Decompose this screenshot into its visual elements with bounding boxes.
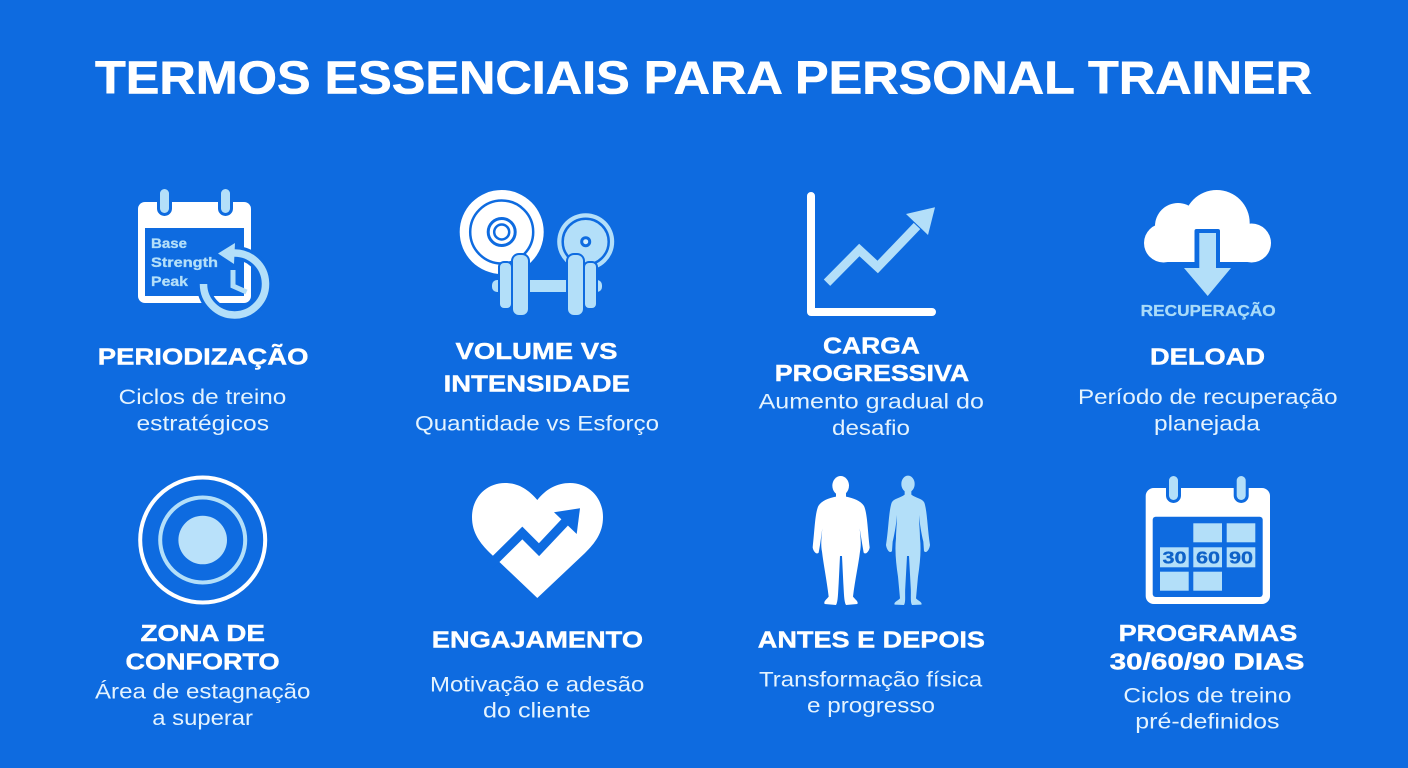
icon: rising line chart — [811, 196, 935, 312]
panel: engajamento — [430, 483, 644, 723]
heading: volume vs intensidade: INTENSIDADE — [444, 371, 630, 397]
icon: calendar with 30 60 90: 90 — [1229, 548, 1253, 568]
icon: concentric target — [140, 478, 265, 602]
icon: calendar with 30 60 90 — [1146, 476, 1270, 604]
icon: cloud with down arrow — [1144, 190, 1271, 296]
description: antes e depois: Transformação física — [759, 668, 983, 691]
panel: programas 30/60/90 dias — [1110, 476, 1304, 733]
heading: periodização: PERIODIZAÇÃO — [98, 342, 308, 369]
description: carga progressiva — [759, 390, 984, 440]
icon: calendar with clock: Base — [151, 235, 187, 251]
description: periodização: Ciclos de treino — [119, 386, 286, 409]
icon: calendar with clock: Strength — [151, 254, 218, 270]
description: periodização — [119, 386, 286, 436]
icon: heart with rising arrow — [472, 483, 603, 598]
silhouette: after — [886, 476, 930, 605]
heading: carga progressiva: CARGA — [823, 332, 920, 358]
silhouette: before — [813, 476, 870, 605]
panel: carga progressiva — [759, 196, 984, 440]
panel: volume vs intensidade — [415, 190, 659, 436]
icon: calendar with 30 60 90: 30 — [1162, 548, 1187, 568]
description: volume vs intensidade: Quantidade vs Esforço — [415, 413, 659, 436]
heading: carga progressiva: PROGRESSIVA — [775, 360, 969, 386]
description: carga progressiva: desafio — [832, 417, 910, 440]
heading: programas 30/60/90 dias — [1110, 620, 1304, 674]
heading: carga progressiva — [775, 332, 969, 386]
description: programas 30/60/90 dias — [1123, 684, 1291, 733]
panel: deload — [1078, 190, 1338, 436]
description: periodização: estratégicos — [136, 413, 269, 436]
icon: before and after body silhouettes — [813, 476, 930, 605]
description: deload: planejada — [1154, 413, 1260, 436]
heading: programas 30/60/90 dias: 30/60/90 DIAS — [1110, 648, 1304, 674]
icon: weight plates and dumbbell — [460, 190, 614, 315]
heading: zona de conforto — [126, 620, 280, 674]
description: programas 30/60/90 dias: pré-definidos — [1135, 710, 1280, 733]
panel: zona de conforto — [95, 478, 310, 730]
panel: antes e depois — [758, 476, 985, 717]
heading: volume vs intensidade: VOLUME VS — [456, 338, 618, 364]
heading: programas 30/60/90 dias: PROGRAMAS — [1119, 620, 1297, 646]
heading: deload: DELOAD — [1150, 344, 1265, 370]
description: programas 30/60/90 dias: Ciclos de treino — [1123, 684, 1291, 707]
panel: periodização — [98, 189, 308, 436]
heading: engajamento: ENGAJAMENTO — [432, 627, 643, 653]
description: zona de conforto: Área de estagnação — [95, 680, 310, 703]
description: zona de conforto: a superar — [152, 707, 253, 730]
description: antes e depois — [759, 668, 983, 717]
icon: calendar with 30 60 90: 60 — [1196, 548, 1220, 568]
description: engajamento — [430, 674, 644, 723]
description: engajamento: Motivação e adesão — [430, 674, 644, 697]
description: deload — [1078, 386, 1338, 436]
description: carga progressiva: Aumento gradual do — [759, 390, 984, 413]
icon label: recuperação: RECUPERAÇÃO — [1141, 300, 1276, 320]
heading: zona de conforto: ZONA DE — [140, 620, 265, 646]
description: zona de conforto — [95, 680, 310, 730]
description: engajamento: do cliente — [483, 700, 591, 723]
icon: calendar with clock: Peak — [151, 273, 188, 289]
description: antes e depois: e progresso — [807, 694, 935, 717]
title: TERMOS ESSENCIAIS PARA PERSONAL TRAINER — [95, 51, 1312, 103]
heading: volume vs intensidade — [444, 338, 630, 397]
description: deload: Período de recuperação — [1078, 386, 1338, 409]
icon: calendar with clock — [138, 189, 265, 315]
heading: antes e depois: ANTES E DEPOIS — [758, 627, 985, 653]
heading: zona de conforto: CONFORTO — [126, 648, 280, 674]
